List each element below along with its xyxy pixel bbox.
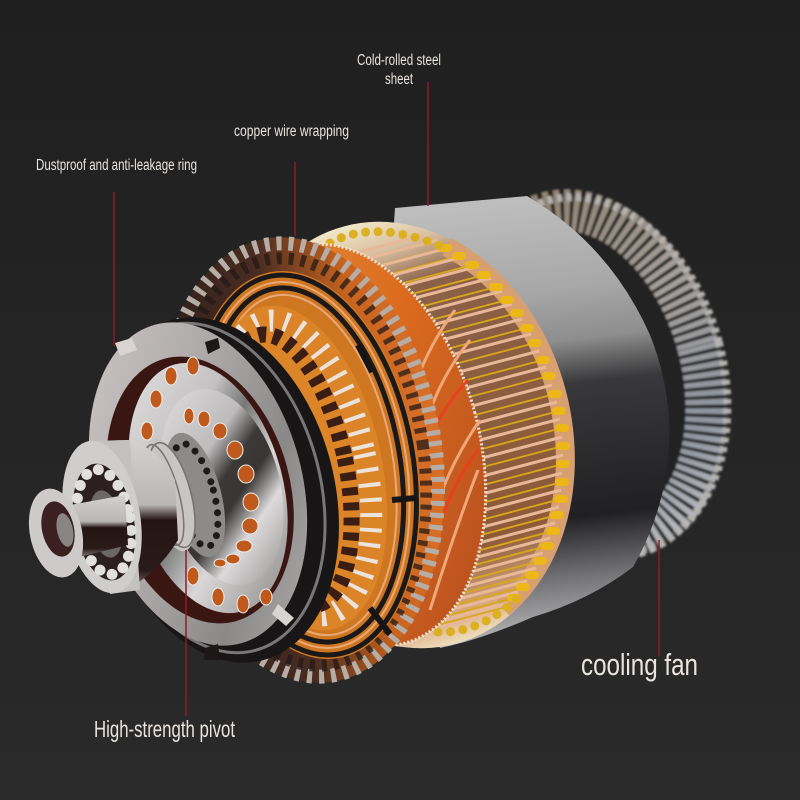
label: cooling fan: cooling fan [581,647,698,682]
front copper ring with wires [180,182,620,688]
cooling fan: rear toothed ring [424,166,766,584]
label: cold-rolled steel sheet: Cold-rolled steel [357,52,441,69]
hub with threads [136,426,237,564]
leader line: cooling fan [658,540,660,656]
label: high-strength pivot: High-strength pivot [94,716,235,742]
peach ring edge [447,247,565,608]
shaft [70,495,128,558]
leader line: cold-rolled steel sheet [427,82,429,206]
axial wires [351,242,563,629]
stator steel sheet body [380,196,669,648]
label: cold-rolled steel sheet [357,52,441,88]
ring lugs [115,338,137,356]
label: cold-rolled steel sheet: sheet [385,71,414,88]
bearing balls [69,465,139,579]
high-strength pivot bearing and shaft [21,435,178,599]
label: copper wire wrapping: copper wire wrapping [234,123,349,140]
bearing face [51,435,153,599]
copper wire wrapping with black bands [161,253,449,677]
perforated inner disc with copper holes [102,345,314,631]
shaft tip flange [21,484,91,582]
leader line: dustproof ring [113,192,115,346]
leader line: high-strength pivot [185,550,187,716]
yellow solder blobs [442,248,566,598]
bearing cylinder [95,440,178,594]
label: dustproof and anti-leakage ring: Dustproof and anti-leakage ring [36,157,197,174]
inner orange winding with silver edge [176,214,528,676]
twisted wires [410,310,480,610]
dustproof and anti-leakage ring end plate [55,290,376,690]
gear ring of silver teeth [128,218,472,702]
top and bottom solder dot arcs [330,232,445,248]
leader line: copper wire wrapping [294,162,296,236]
